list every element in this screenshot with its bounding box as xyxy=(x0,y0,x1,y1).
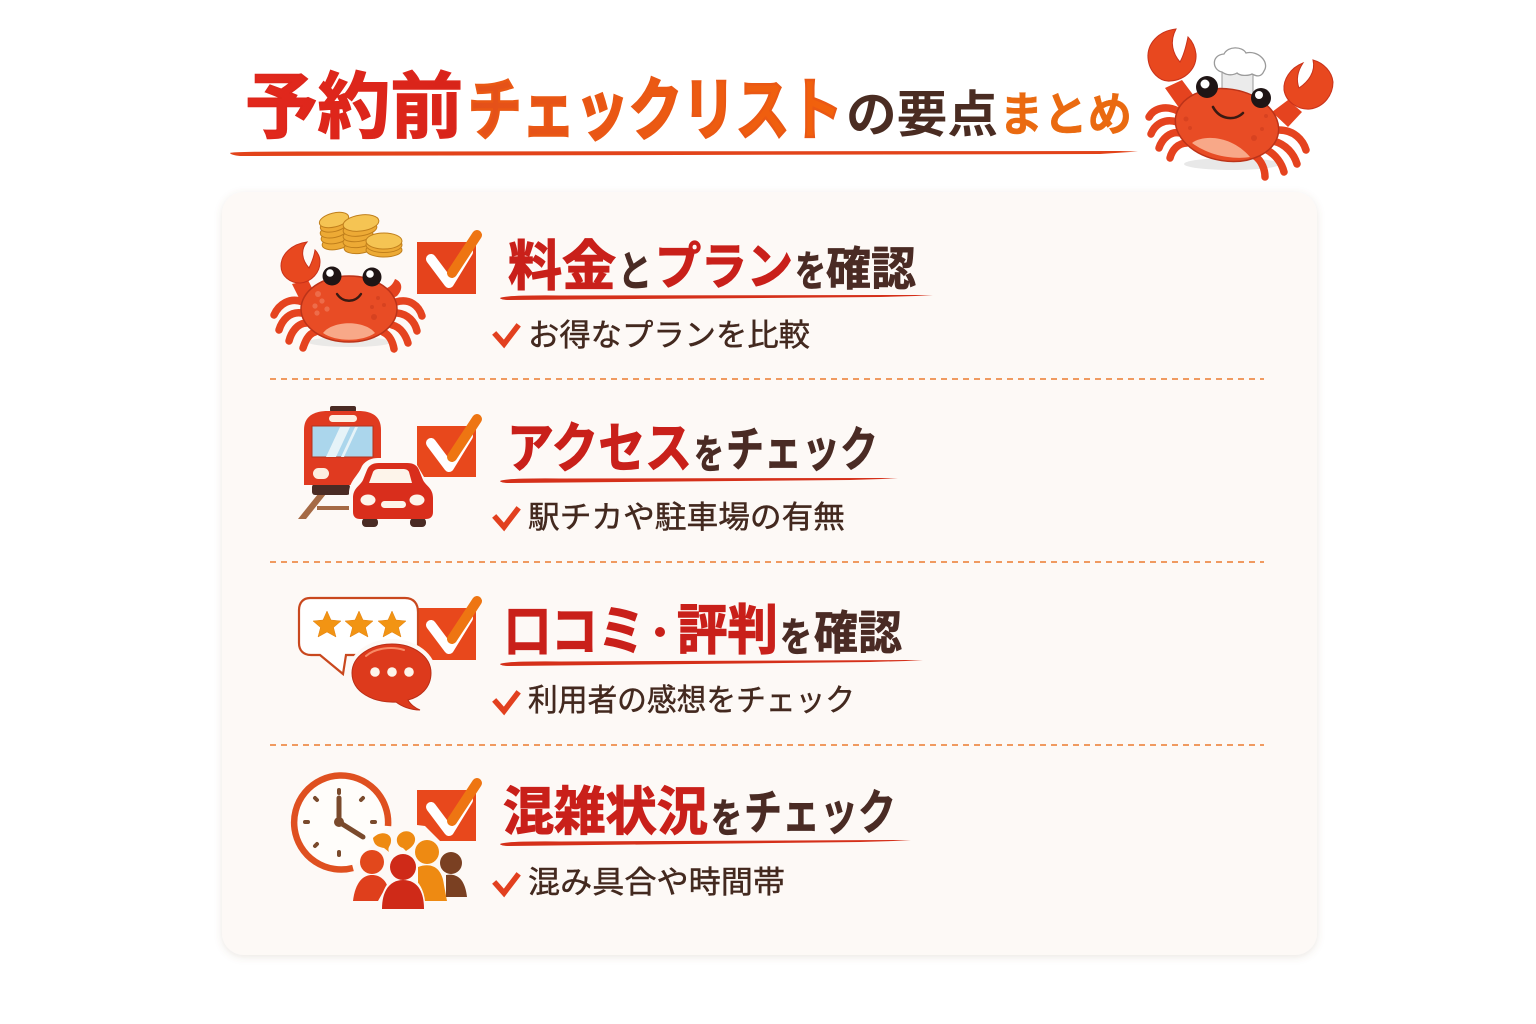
heading xyxy=(507,419,878,479)
heading: チェック xyxy=(744,787,896,840)
icon: checkbox xyxy=(417,783,477,841)
heading: 混雑状況 xyxy=(503,784,708,842)
icon: chef crab mascot xyxy=(1148,29,1333,177)
icon: checkbox xyxy=(417,235,477,294)
heading: チェック xyxy=(726,424,878,477)
icon: review speech bubbles xyxy=(299,598,436,710)
panel: checklist card xyxy=(222,192,1317,955)
icon: clock and crowd xyxy=(294,776,467,909)
heading: 評判 xyxy=(677,601,778,661)
heading: を xyxy=(694,433,724,477)
title: 予約前 xyxy=(245,68,463,148)
heading: 確認 xyxy=(826,243,916,295)
heading: 料金 xyxy=(508,237,616,297)
row 2: access xyxy=(298,406,898,535)
heading: アクセス xyxy=(507,419,692,479)
heading: を xyxy=(711,797,742,841)
title: まとめ xyxy=(999,88,1132,141)
heading underline xyxy=(500,295,933,300)
heading: を xyxy=(780,616,812,660)
heading xyxy=(508,237,916,297)
icon: checkbox xyxy=(417,419,477,477)
heading xyxy=(504,601,902,662)
row 3: reviews xyxy=(299,598,923,718)
sub-item: 混み具合や時間帯 xyxy=(528,865,785,900)
icon: train and car xyxy=(298,406,438,527)
heading: プラン xyxy=(655,239,793,295)
title xyxy=(245,68,1132,149)
sub-item: お得なプランを比較 xyxy=(528,318,810,353)
heading underline xyxy=(500,660,923,666)
title: の要点 xyxy=(846,87,998,143)
heading underline xyxy=(500,840,911,846)
title: チェックリスト xyxy=(468,73,843,149)
heading xyxy=(503,784,896,842)
heading: 確認 xyxy=(814,607,902,659)
icon: crab with coins xyxy=(274,210,422,349)
heading underline xyxy=(500,478,898,483)
row 4: crowding xyxy=(294,776,911,909)
sub-item: 駅チカや駐車場の有無 xyxy=(528,500,845,535)
sub-item: 利用者の感想をチェック xyxy=(528,683,855,718)
title underline xyxy=(230,151,1138,156)
row 1: price and plan xyxy=(274,210,933,353)
heading: を xyxy=(795,248,826,295)
heading: と xyxy=(618,248,652,295)
heading: 口コミ xyxy=(504,602,645,662)
icon: checkbox xyxy=(417,601,477,660)
